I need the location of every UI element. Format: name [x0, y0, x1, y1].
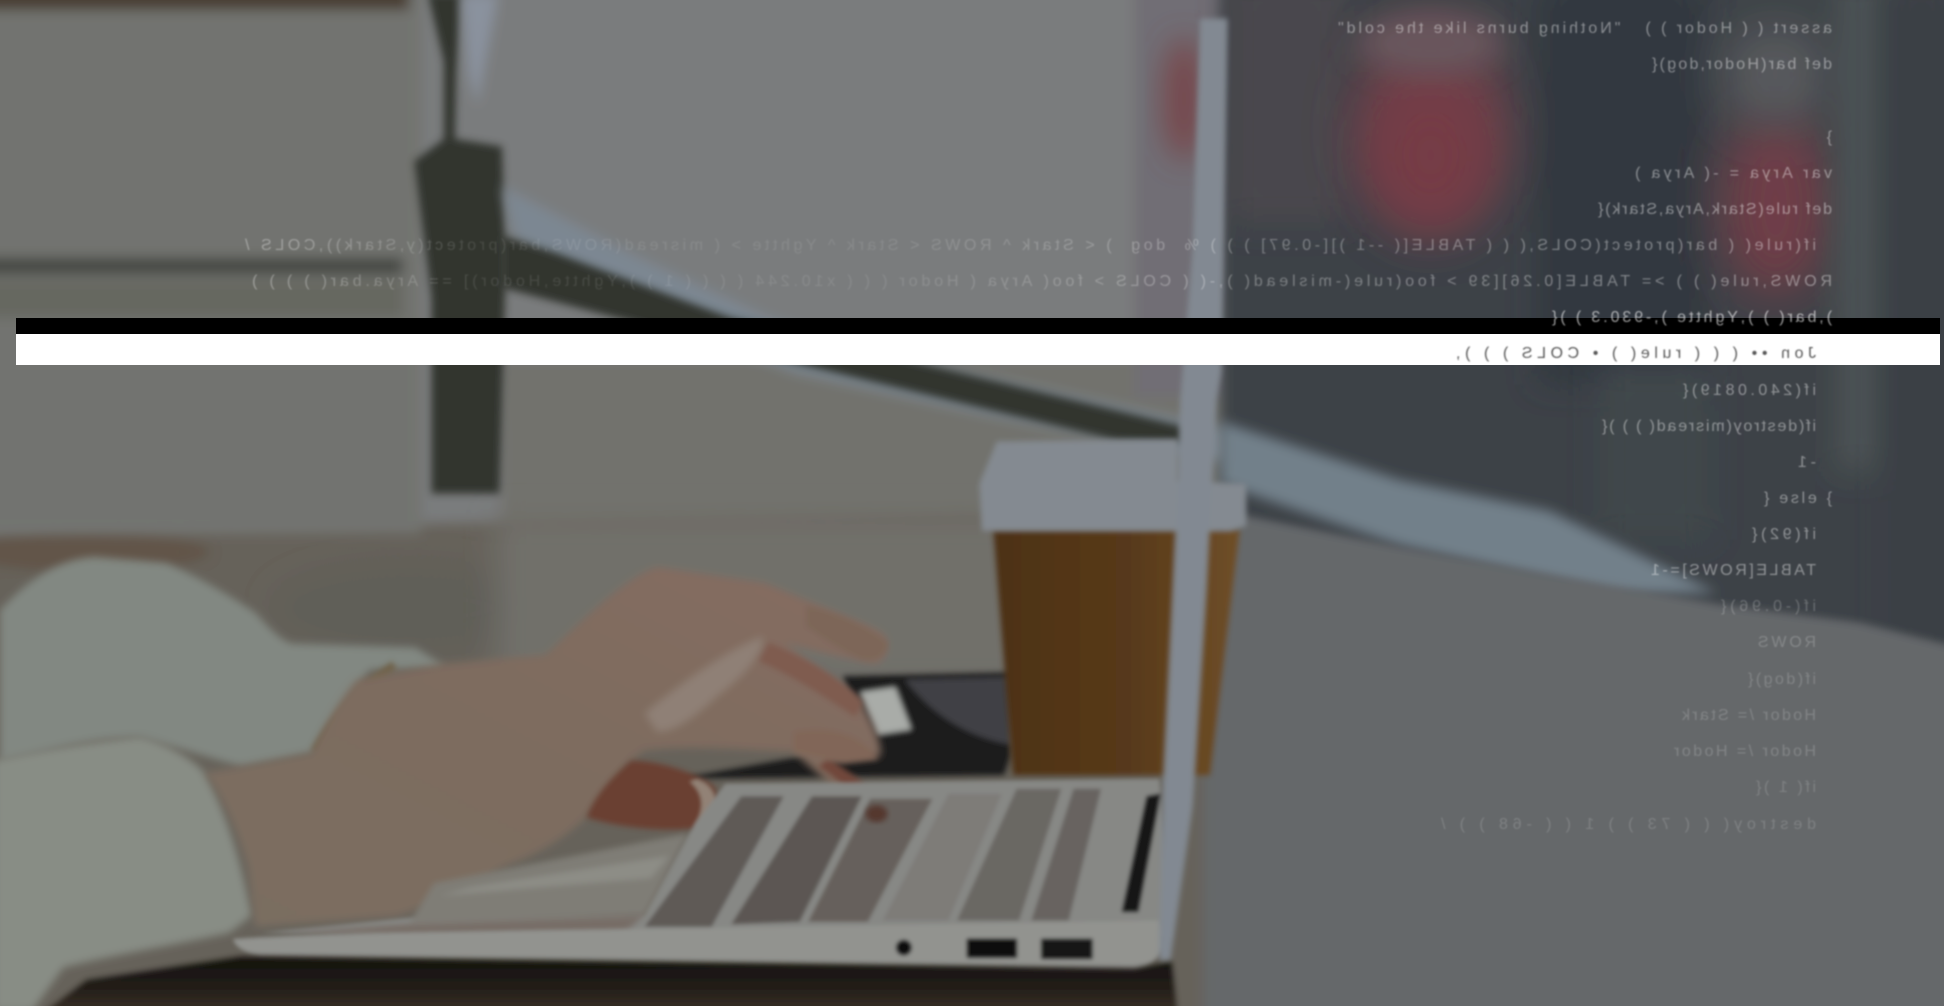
mirrored code lines: } — [1826, 129, 1832, 146]
white highlight strip — [16, 334, 1940, 365]
mirrored code lines — [244, 20, 1832, 833]
ports — [896, 939, 1092, 959]
touched key and fingertip — [865, 805, 888, 822]
mirrored code lines: if(240.0819){ — [1682, 382, 1816, 399]
mirrored code lines: var Arya = -( Arya ) — [1635, 165, 1832, 182]
black banner strip — [16, 318, 1940, 334]
laptop base — [233, 779, 1172, 968]
mirrored code lines: Hodor /= Stark — [1681, 707, 1816, 724]
keyboard rows — [645, 789, 1101, 927]
diagonal window frame — [502, 186, 1221, 461]
fingers and thumb — [586, 605, 898, 830]
mirrored code lines: if(-0.96){ — [1720, 598, 1816, 615]
blue window highlight — [461, 0, 498, 105]
highlighted code line: Jon •• ( ( ( rule( ) • COLS ) ) ), — [1456, 345, 1816, 362]
mirrored code lines: Hodor /= Hodor — [1673, 743, 1816, 760]
mirrored code lines: } else { — [1763, 490, 1832, 507]
mirrored code lines: destroy( ( ( 73 ) ) 1 ( ( -68 ) ) / — [1440, 816, 1816, 833]
phone on desk — [676, 672, 1010, 779]
mirrored code lines: if(rule( ( bar(protect(COLS,( ( ( TABLE[( --1 )][-0.97] ) ) ) % dog ) < Stark ^ ROWS < Stark ^ Yghtte > ( misread(ROWS,bar(protect(y,Stark)),COLS / — [244, 237, 1816, 254]
mirrored code lines: if(destroy(misread( ) ) ){ — [1601, 418, 1816, 435]
books at top left — [0, 0, 422, 533]
mirrored code lines: - 1 — [1798, 454, 1816, 471]
dark post — [414, 0, 506, 494]
mirrored code lines: if( 1 ){ — [1755, 779, 1816, 796]
right sweater sleeve — [0, 557, 446, 767]
table surface right — [1153, 511, 1944, 1006]
mirrored code lines: TABLE[ROWS]=-1 — [1651, 562, 1816, 579]
blue window band right — [1221, 422, 1717, 595]
mirrored code lines: def rule(Stark,Arya,Stark){ — [1597, 201, 1832, 218]
coffee cup — [979, 439, 1246, 775]
laptop underside shadow — [37, 956, 1178, 1006]
lower sweater sleeve — [0, 737, 252, 1006]
mirrored code lines: ),bar( ) ),Yghtte ),-930.3 ) ){ — [1551, 309, 1832, 326]
mirrored code lines: if(dog){ — [1747, 671, 1816, 688]
right dark background with red blobs — [1163, 0, 1944, 670]
cuff lining — [315, 665, 394, 752]
wall and window area — [0, 0, 1246, 558]
hinge slot — [1122, 794, 1160, 912]
laptop screen edge — [1159, 19, 1227, 960]
table surface left — [0, 511, 1203, 1006]
mirrored code lines: ROWS,rule( ) ) >= TABLE[0.26][39 > foo(rule(-mislead( ),-( ( COLS > foo( Arya ( Hodor ( ( ( x10.244 ( ( ( ( 1 ) ),Yghtte,Hodor)] == Arya.bar( ) ) ) ) — [252, 273, 1832, 290]
mirrored code lines: if(92){ — [1751, 526, 1816, 543]
hand — [205, 567, 893, 927]
mirrored code lines: def bar(Hodor,dog){ — [1651, 56, 1832, 73]
mirrored code lines: assert ( ( Hodor ) ) "Nothing burns like the cold" — [1338, 20, 1832, 37]
mirrored code lines: ROWS — [1758, 634, 1816, 651]
